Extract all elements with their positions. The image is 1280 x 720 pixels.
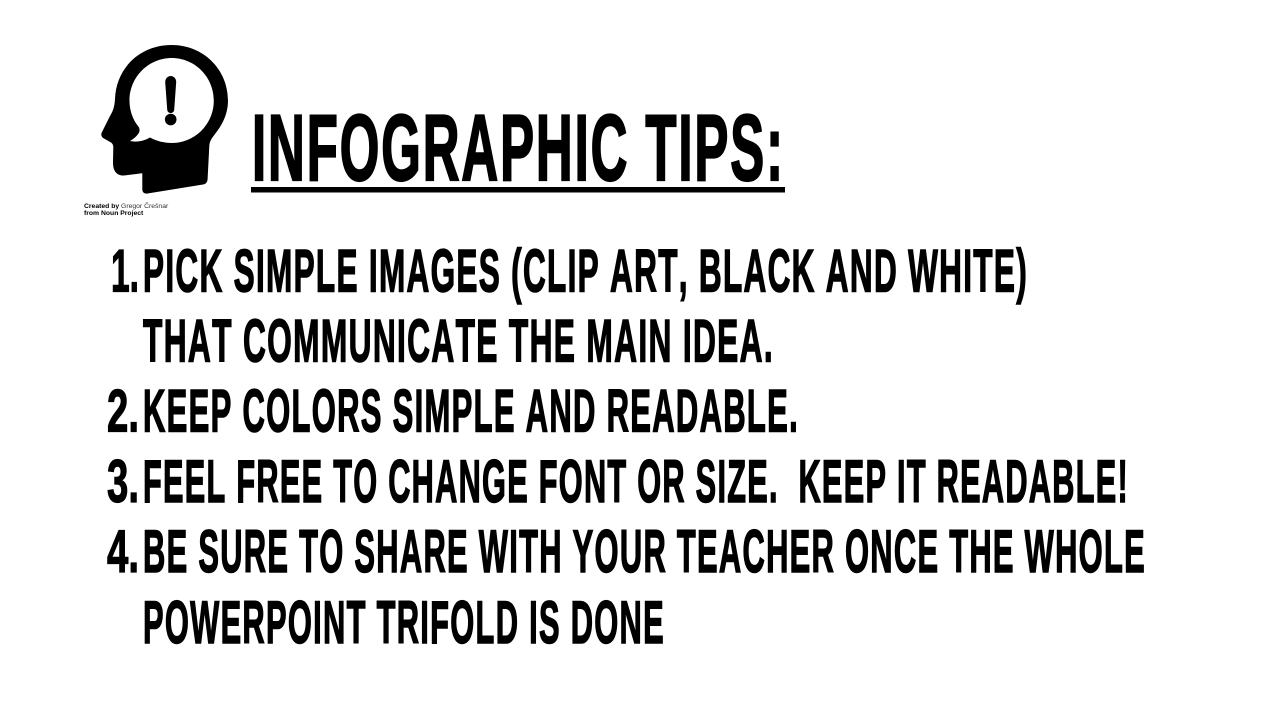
title: INFOGRAPHIC TIPS:: [252, 95, 785, 200]
icon attribution: [84, 201, 169, 217]
tip 4: 4.: [107, 518, 139, 585]
tip 1: [111, 238, 1028, 375]
icon: head with speech bubble and exclamation mark: [101, 45, 228, 194]
icon attribution: from Noun Project: [84, 210, 144, 217]
title: [251, 95, 785, 200]
icon attribution: Created by Gregor Črešnar: [84, 201, 169, 210]
tip 3: 3.: [107, 448, 139, 515]
tip 4: [107, 518, 1146, 656]
tip 4: POWERPOINT TRIFOLD IS DONE: [143, 589, 665, 656]
tip 2: [107, 378, 799, 445]
tip 2: 2.: [107, 378, 139, 445]
tip 1: 1.: [111, 238, 139, 304]
